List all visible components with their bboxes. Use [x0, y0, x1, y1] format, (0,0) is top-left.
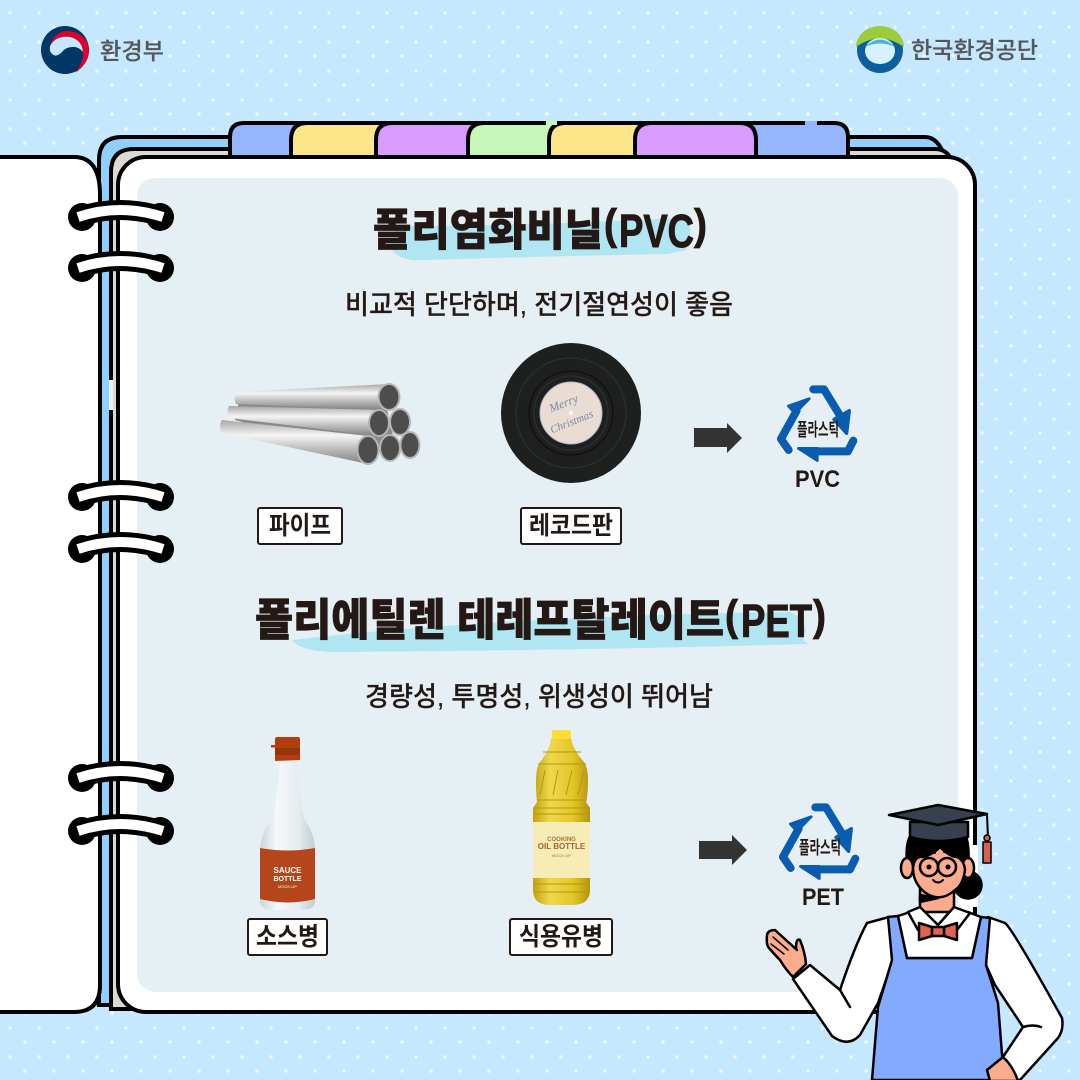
- logo: korea environment corporation: [856, 26, 1038, 73]
- hand pointing: [767, 930, 806, 977]
- hair and bun: [907, 834, 982, 898]
- logo: ministry of environment: [41, 26, 164, 74]
- heading: PET: (: [725, 592, 739, 640]
- recycle icon: PET: PET: [802, 884, 844, 911]
- image: sauce bottle: MOCK-UP: [278, 884, 297, 889]
- label: sauce bottle: [248, 919, 327, 955]
- content panel: [137, 178, 958, 992]
- heading: PVC: PVC: [619, 205, 694, 257]
- right sleeve crease: [1023, 1026, 1041, 1027]
- logo: ministry of environment: 환경부: [100, 38, 164, 64]
- hand on hip: [987, 1057, 1018, 1080]
- notebook left cover page: [0, 157, 100, 1012]
- arrow: PVC: [694, 423, 742, 453]
- binder rings: [68, 203, 174, 845]
- apron: [872, 916, 1004, 1080]
- recycle icon: PVC: [781, 389, 853, 493]
- label: pipe: 파이프: [269, 512, 331, 540]
- character: teacher: [767, 805, 1062, 1080]
- image: sauce bottle: BOTTLE: [274, 876, 302, 883]
- collar: [908, 907, 970, 930]
- glasses: [920, 852, 956, 882]
- notebook main page: [118, 157, 978, 1012]
- bib: [898, 912, 981, 958]
- heading: PET: 폴리에틸렌 테레프탈레이트: [255, 596, 724, 645]
- image: cooking oil bottle: [533, 730, 590, 905]
- left sleeve crease: [840, 990, 850, 1007]
- label: cooking oil bottle: 식용유병: [519, 923, 603, 951]
- image: sauce bottle: SAUCE: [273, 866, 302, 875]
- image: vinyl record: Christmas: [549, 408, 595, 436]
- right arm: [986, 917, 1062, 1080]
- recycle icon: PVC: PVC: [795, 466, 840, 493]
- recycle icon: PVC: 플라스틱: [797, 420, 839, 440]
- heading: PVC: (: [604, 201, 618, 249]
- tassel: [983, 815, 991, 863]
- heading: PVC: [373, 201, 707, 260]
- image: sauce bottle: [260, 737, 315, 910]
- recycle icon: PET: [783, 807, 855, 911]
- label: pipe: [258, 508, 342, 544]
- arrow: PET: [699, 835, 747, 865]
- heading: PET: PET: [741, 595, 812, 647]
- image: pipes: [220, 384, 420, 464]
- notebook tabs: [230, 123, 848, 157]
- image: vinyl record: Merry: [546, 391, 581, 416]
- neck: [920, 885, 954, 926]
- cap base: [910, 822, 968, 841]
- label: sauce bottle: 소스병: [256, 923, 319, 951]
- ears: [901, 858, 974, 878]
- heading: PVC: ): [694, 201, 707, 249]
- image: cooking oil bottle: OIL BOTTLE: [538, 842, 586, 851]
- image: vinyl record: [501, 343, 641, 483]
- logo: korea environment corporation: 한국환경공단: [911, 37, 1038, 63]
- image: cooking oil bottle: MOCK-UP: [552, 853, 571, 858]
- notebook: back pages: [99, 137, 950, 1009]
- image: cooking oil bottle: COOKING: [547, 837, 576, 843]
- heading: PET: ): [813, 592, 826, 640]
- recycle icon: PET: 플라스틱: [799, 838, 841, 858]
- heading: PVC: 폴리염화비닐: [373, 206, 603, 255]
- face: [913, 847, 965, 897]
- cap board: [889, 805, 987, 825]
- left arm: [793, 917, 893, 1042]
- description: PET: 경량성, 투명성, 위생성이 뛰어남: [365, 682, 713, 712]
- bow tie: [919, 923, 957, 940]
- label: record: 레코드판: [529, 512, 613, 540]
- description: PVC: 비교적 단단하며, 전기절연성이 좋음: [345, 290, 733, 320]
